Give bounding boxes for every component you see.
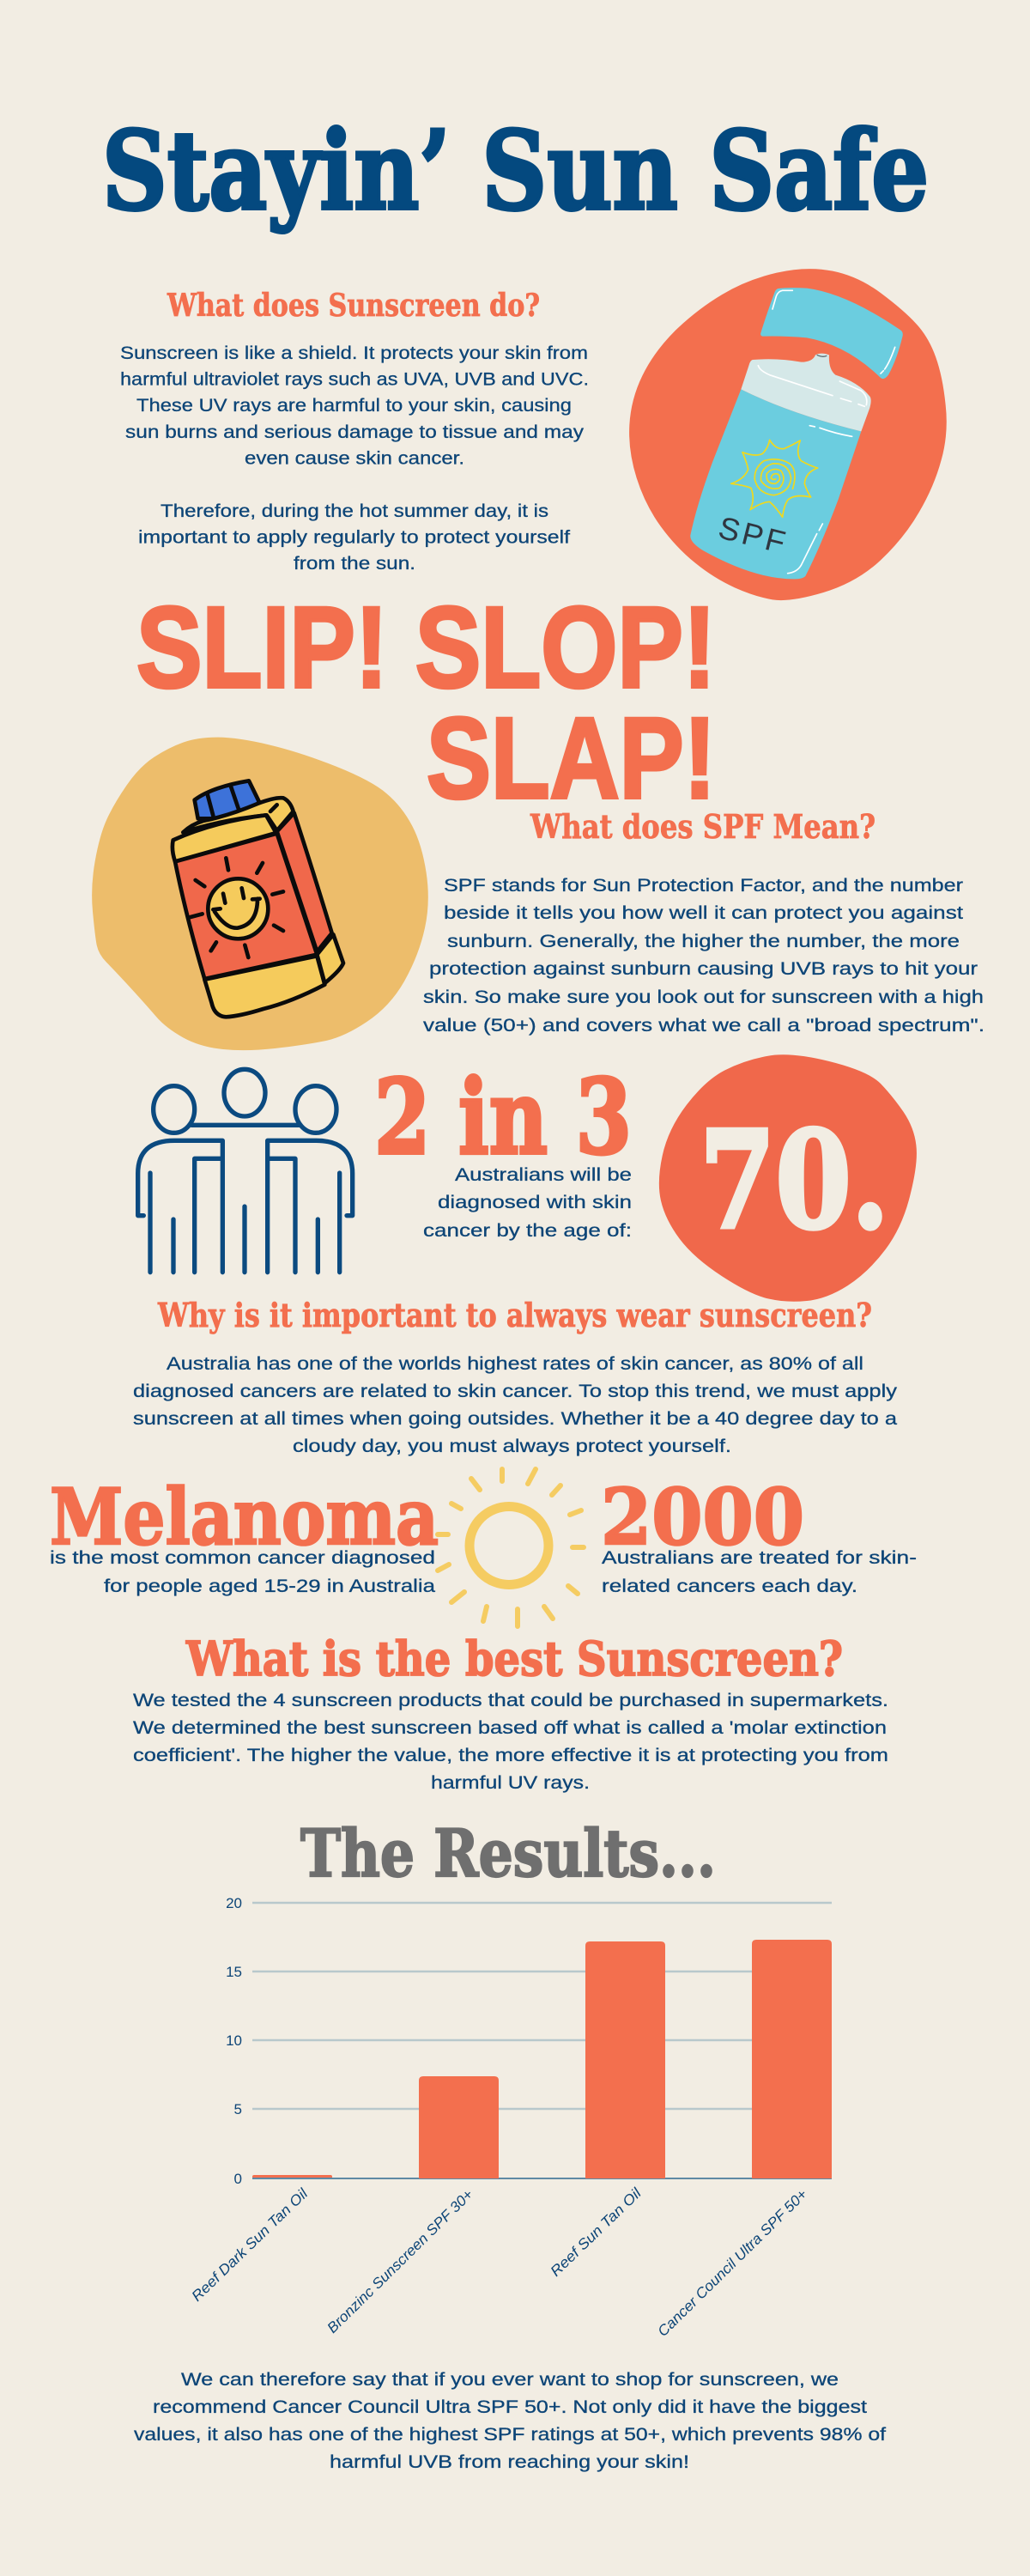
text block: recommendation: We can therefore say that if you ever want to shop for sunscreen, we xyxy=(181,2370,839,2390)
heading: best sunscreen: What is the best Sunscreen? xyxy=(185,1631,843,1686)
icon: smiley sun lotion bottle on yellow blob xyxy=(92,738,428,1050)
text block: Australians diagnosed: cancer by the age of: xyxy=(423,1221,632,1241)
y axis labels: 10 xyxy=(226,2032,242,2049)
icon: three people xyxy=(138,1069,353,1273)
stat: melanoma: for people aged 15-29 in Australia xyxy=(104,1577,435,1596)
text block: testing method: We determined the best sunscreen based off what is called a 'molar extinction xyxy=(133,1718,887,1738)
text block: Australians diagnosed xyxy=(423,1165,632,1241)
y axis labels: 0 xyxy=(234,2171,242,2187)
slogan: Slip Slop Slap: SLIP! SLOP! xyxy=(136,584,716,712)
stat: melanoma: Melanoma xyxy=(50,1472,439,1563)
stat: age 70 on coral blob xyxy=(659,1054,917,1302)
text block: why wear sunscreen: sunscreen at all times when going outsides. Whether it be a 40 degree day to a xyxy=(133,1409,897,1429)
slogan: Slip Slop Slap xyxy=(136,584,716,823)
text block: SPF explanation: protection against sunburn causing UVB rays to hit your xyxy=(429,959,978,979)
heading: the results: The Results... xyxy=(300,1815,716,1892)
text block: sunscreen explanation: important to apply regularly to protect yourself xyxy=(138,527,570,548)
text block: testing method: We tested the 4 sunscreen products that could be purchased in supermarkets. xyxy=(133,1691,888,1710)
text block: SPF explanation xyxy=(423,876,985,1036)
heading: what does SPF mean: What does SPF Mean? xyxy=(530,807,876,846)
text block: recommendation: recommend Cancer Council Ultra SPF 50+. Not only did it have the biggest xyxy=(153,2397,867,2417)
text block: recommendation: harmful UVB from reaching your skin! xyxy=(330,2452,689,2472)
text block: SPF explanation: beside it tells you how well it can protect you against xyxy=(444,903,963,923)
x axis labels: Reef Sun Tan Oil xyxy=(548,2184,645,2280)
text block: SPF explanation: value (50+) and covers what we call a "broad spectrum". xyxy=(423,1016,985,1036)
stat: melanoma xyxy=(50,1472,439,1596)
text block: recommendation xyxy=(134,2370,886,2472)
text block: sunscreen explanation: even cause skin cancer. xyxy=(245,448,464,469)
text block: SPF explanation: sunburn. Generally, the higher the number, the more xyxy=(447,932,960,951)
text block: sunscreen explanation: sun burns and serious damage to tissue and may xyxy=(125,422,585,442)
heading: why wear sunscreen: Why is it important to always wear sunscreen? xyxy=(157,1296,872,1334)
text block: sunscreen explanation: harmful ultraviolet rays such as UVA, UVB and UVC. xyxy=(120,369,589,390)
text block: Australians diagnosed: Australians will be xyxy=(455,1165,632,1185)
stat: 2 in 3: 2 in 3 xyxy=(374,1057,632,1178)
text block: testing method: harmful UV rays. xyxy=(431,1773,590,1793)
x axis labels xyxy=(189,2184,810,2340)
y axis labels: 5 xyxy=(234,2101,242,2117)
text block: testing method xyxy=(133,1691,888,1793)
bar chart xyxy=(189,1895,832,2340)
stat: age 70 on coral blob: 70. xyxy=(700,1102,889,1259)
icon: blue sunscreen bottle on coral blob xyxy=(629,269,947,600)
x axis labels: Cancer Council Ultra SPF 50+ xyxy=(654,2186,810,2340)
text block: recommendation: values, it also has one of the highest SPF ratings at 50+, which prevents 98% of xyxy=(134,2425,886,2445)
text block: testing method: coefficient'. The higher the value, the more effective it is at protecting you from xyxy=(133,1746,888,1765)
text block: SPF explanation: skin. So make sure you look out for sunscreen with a high xyxy=(423,987,984,1007)
text block: why wear sunscreen: cloudy day, you must always protect yourself. xyxy=(293,1437,731,1456)
slogan: Slip Slop Slap: SLAP! xyxy=(427,695,716,823)
stat: 2000: Australians are treated for skin- xyxy=(602,1548,917,1568)
text block: why wear sunscreen: diagnosed cancers are related to skin cancer. To stop this trend, we must apply xyxy=(133,1382,898,1401)
y axis labels: 20 xyxy=(226,1895,242,1911)
stat: 2000 xyxy=(601,1472,917,1596)
text block: sunscreen explanation: Therefore, during the hot summer day, it is xyxy=(161,501,548,521)
label: SPF on bottle: SPF xyxy=(715,510,789,560)
stat: 2000: related cancers each day. xyxy=(602,1577,857,1596)
bars xyxy=(252,1940,832,2178)
x axis labels: Bronzinc Sunscreen SPF 30+ xyxy=(324,2186,476,2336)
icon: sun xyxy=(438,1469,584,1626)
y axis labels: 15 xyxy=(226,1964,242,1980)
text block: sunscreen explanation: These UV rays are harmful to your skin, causing xyxy=(136,396,572,416)
heading: what does sunscreen do: What does Sunscreen do? xyxy=(167,288,540,324)
y axis labels xyxy=(226,1895,242,2187)
stat: melanoma: is the most common cancer diagnosed xyxy=(50,1548,435,1568)
text block: sunscreen explanation: Sunscreen is like a shield. It protects your skin from xyxy=(120,343,588,363)
text block: sunscreen explanation xyxy=(120,343,589,574)
x axis labels: Reef Dark Sun Tan Oil xyxy=(189,2184,312,2305)
stat: 2000: 2000 xyxy=(601,1472,804,1563)
text block: why wear sunscreen: Australia has one of the worlds highest rates of skin cancer, as 80% of all xyxy=(167,1354,863,1374)
text block: Australians diagnosed: diagnosed with skin xyxy=(438,1193,632,1212)
text block: why wear sunscreen xyxy=(133,1354,898,1456)
text block: SPF explanation: SPF stands for Sun Protection Factor, and the number xyxy=(444,876,963,896)
text block: sunscreen explanation: from the sun. xyxy=(294,554,415,574)
